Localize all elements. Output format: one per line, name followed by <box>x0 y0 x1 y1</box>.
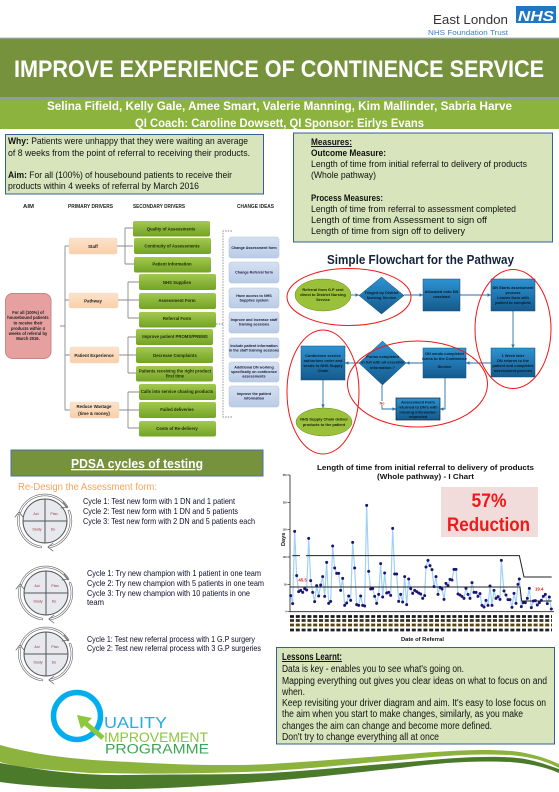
flowchart nodes: process <box>506 290 520 295</box>
callout: 57% reduction: Reduction <box>447 515 530 536</box>
flowchart nodes: Nursing Service <box>367 295 397 300</box>
secondary driver boxes: Assessment Form <box>158 298 196 303</box>
PDSA cycle text block 3: Cycle 2: Test new referral process with 3 G.P surgeries <box>87 644 261 653</box>
chart plot: 250 <box>283 475 287 477</box>
aim box: housebound patients <box>7 315 49 320</box>
I chart <box>281 463 554 643</box>
secondary driver boxes: Patients receiving the right product <box>139 368 212 374</box>
QI programme logo: IMPROVEMENT <box>104 730 208 745</box>
panel: lessons learnt: Don't try to change everything all at once <box>282 732 439 743</box>
icon: PDSA cycle 2: Do <box>52 600 56 604</box>
chart plot <box>283 475 554 614</box>
flowchart nodes: DN returns to the <box>497 358 530 363</box>
PDSA heading: PDSA cycles of testing <box>71 456 203 471</box>
flowchart nodes: Service <box>316 297 331 302</box>
panel: measures: (Whole pathway) <box>311 170 376 181</box>
secondary driver boxes: Costs of Re-delivery <box>156 426 198 431</box>
panel: lessons learnt: when. <box>281 687 305 698</box>
icon: PDSA cycle 3: Act <box>34 645 40 649</box>
change idea boxes: information <box>244 396 265 400</box>
flowchart nodes: caseload <box>433 294 450 299</box>
flowchart nodes: DN Starts assessment <box>492 285 534 290</box>
flowchart nodes: assessment process <box>494 368 532 373</box>
chart plot: 50 <box>284 584 287 586</box>
secondary driver boxes: Quality of Assessments <box>147 226 196 232</box>
PDSA cycle text block 1: Cycle 3: Test new form with 2 DN and 5 patients each <box>83 517 255 526</box>
change idea boxes: Change Assessment form <box>231 246 277 250</box>
chart axis labels: Date of Referral <box>401 637 444 643</box>
change idea boxes: Have access to NHS <box>236 294 272 298</box>
change idea boxes: Additional DN working <box>234 366 274 370</box>
chart title <box>317 463 534 481</box>
flowchart arrows <box>323 295 513 409</box>
flowchart nodes: missing information <box>399 410 437 414</box>
header logo: East London NHS Foundation Trust: NHS <box>518 8 554 25</box>
secondary driver boxes: Decrease Complaints <box>153 353 197 358</box>
change idea boxes <box>229 237 279 407</box>
chart title: Length of time from initial referral to delivery of products <box>317 463 534 472</box>
secondary driver boxes <box>133 221 216 436</box>
panel: lessons learnt: changes the aim can change and become more defined. <box>282 721 492 732</box>
chart x-axis date ticks <box>290 616 552 630</box>
panel: why and aim: products within 4 weeks of referral by March 2016 <box>8 181 199 192</box>
primary driver boxes: Reduce Wastage <box>77 404 112 409</box>
panel: why and aim: Aim: For all (100%) of housebound patients to receive their <box>8 170 232 181</box>
PDSA cycle text block 1: Cycle 1: Test new form with 1 DN and 1 patient <box>83 497 236 506</box>
aim box: March 2016. <box>16 336 40 341</box>
icon: PDSA cycle 2: Act <box>34 584 40 588</box>
chart plot: 45.5 <box>298 578 307 583</box>
flowchart nodes: Triaged by District <box>365 290 399 295</box>
panel: measures <box>294 133 552 242</box>
PDSA cycle text block 3 <box>87 635 261 653</box>
icon: PDSA cycle 3 <box>16 628 72 684</box>
aim box: weeks of referral by <box>8 331 48 336</box>
flowchart nodes: patient and completes <box>492 363 534 368</box>
flowchart nodes: No <box>380 402 385 406</box>
chart plot: 0 <box>285 612 287 614</box>
panel: why and aim: Why: Patients were unhappy that they were waiting an average <box>8 136 248 147</box>
flowchart nodes: Forms completed <box>366 354 399 359</box>
panel: lessons learnt: Data is key - enables you to see what's going on. <box>282 664 464 675</box>
panel: measures: Measures: <box>311 137 352 148</box>
panel: lessons learnt: Lessons Learnt: <box>282 652 342 663</box>
chart plot: 19.4 <box>535 586 544 591</box>
panel: measures: Length of time from Assessment to sign off <box>311 215 487 226</box>
flowchart nodes: information ? <box>370 365 396 370</box>
PDSA cycle text block 2: Cycle 1: Try new champion with 1 patient in one team <box>87 569 261 578</box>
driver diagram <box>6 204 279 436</box>
PDSA cycle text block 2: Cycle 2: Try new champion with 5 patients in one team <box>87 579 264 588</box>
QI programme logo: UALITY <box>104 715 167 732</box>
secondary driver boxes: Improve patient PROMS/PREMS <box>142 334 208 339</box>
icon: PDSA cycle 3: Do <box>52 660 56 664</box>
PDSA cycle text block 2 <box>87 569 264 607</box>
flowchart nodes: Leaves form with <box>497 295 530 300</box>
primary driver boxes: (time & money) <box>78 411 110 416</box>
flowchart nodes: Chain <box>318 368 329 373</box>
change idea boxes: Include patient information <box>230 344 278 348</box>
panel: measures: Length of time from sign off to delivery <box>311 226 465 237</box>
icon: PDSA cycle 2: Study <box>33 600 43 604</box>
header logo: East London NHS Foundation Trust: NHS Foundation Trust <box>428 28 509 37</box>
re-design subheading: Re-Design the Assessment form: <box>18 482 157 493</box>
flowchart nodes: 1 Week later <box>502 353 525 358</box>
red highlight ellipses <box>287 268 551 454</box>
team names band: QI Coach: Caroline Dowsett, QI Sponsor: Eirlys Evans <box>135 118 424 130</box>
change idea boxes: Improve the patient <box>237 392 272 396</box>
chart title: (Whole pathway) - I Chart <box>377 472 475 481</box>
PDSA heading <box>11 450 263 476</box>
change idea boxes: specifically on continence <box>231 370 277 374</box>
flowchart nodes: Allocated onto DN <box>425 289 459 294</box>
flowchart nodes: NHS Supply Chain deliver <box>300 416 348 422</box>
driver diagram column headings: AIM <box>23 204 34 210</box>
secondary driver boxes: first time <box>166 374 185 378</box>
icon: PDSA cycle 2: Plan <box>51 584 59 588</box>
flowchart nodes: requested <box>409 414 428 419</box>
PDSA cycle text block 1 <box>83 497 255 526</box>
driver diagram column headings: PRIMARY DRIVERS <box>68 204 114 210</box>
flowchart nodes: patient to complete <box>495 300 532 305</box>
flowchart title: Simple Flowchart for the Pathway <box>327 252 515 267</box>
icon: PDSA cycle 3: Plan <box>51 645 59 649</box>
icon: PDSA cycle 1: Study <box>32 528 42 532</box>
flowchart nodes: returned to DN's with <box>398 404 438 410</box>
icon: PDSA cycle 1: Act <box>33 512 39 516</box>
aim box: products within 4 <box>11 326 46 331</box>
flowchart nodes: forms to the Continence <box>422 356 468 361</box>
primary driver boxes: Pathway <box>84 298 102 304</box>
chart axis labels <box>281 533 444 643</box>
callout: 57% reduction <box>441 487 538 537</box>
driver diagram column headings: CHANGE IDEAS <box>237 204 275 210</box>
flowchart nodes <box>295 277 535 436</box>
flowchart nodes: authorises order and <box>304 358 343 363</box>
header logo: East London NHS Foundation Trust <box>428 6 556 37</box>
primary driver boxes: Staff <box>88 244 98 249</box>
header logo: East London NHS Foundation Trust: East London <box>433 12 508 27</box>
change idea boxes: assessments <box>242 374 266 378</box>
secondary driver boxes: Calls into service chasing products <box>141 389 214 394</box>
change idea boxes: Improve and increase staff <box>231 318 278 322</box>
chart plot: 100 <box>283 557 287 559</box>
change idea boxes: Change Referral form <box>235 270 274 274</box>
chart plot: 200 <box>283 503 287 505</box>
flowchart <box>287 252 551 454</box>
PDSA cycle text block 1: Cycle 2: Test new form with 1 DN and 5 patients <box>83 507 238 516</box>
flowchart nodes: direct to District Nursing <box>300 292 346 297</box>
chart plot: 150 <box>283 530 287 532</box>
panel: lessons learnt <box>276 648 554 744</box>
flowchart nodes: Assessment Form <box>401 400 435 404</box>
panel: why and aim <box>6 134 264 194</box>
icon: PDSA cycle 1: Plan <box>50 512 58 516</box>
icon: PDSA cycle 2 <box>16 567 72 623</box>
flowchart nodes: in full with all essential <box>361 360 404 364</box>
primary driver boxes: Patient Experience <box>74 353 114 358</box>
flowchart nodes: Referral from G.P sent <box>302 287 344 292</box>
flowchart nodes: products to the patient <box>303 422 346 427</box>
secondary driver boxes: Failed deliveries <box>160 407 194 412</box>
icon: PDSA cycle 1 <box>15 495 71 551</box>
aim box: For all (100%) of <box>12 310 44 315</box>
secondary driver boxes: NHS Supplies <box>163 280 192 285</box>
icon: PDSA cycle 3: Study <box>33 660 43 664</box>
PDSA cycle text block 2: Cycle 3: Try new champion with 10 patients in one <box>87 589 250 598</box>
panel: lessons learnt: the aim when you start to make changes, similarly, as you make <box>282 709 523 720</box>
primary driver boxes <box>69 238 119 418</box>
team names band <box>0 97 559 130</box>
footer swoosh <box>0 745 559 789</box>
change idea boxes: in the staff training sessions <box>229 348 279 352</box>
team names band: Selina Fifield, Kelly Gale, Amee Smart, Valerie Manning, Kim Mallinder, Sabria Harve <box>47 101 512 113</box>
change idea boxes: Supplies system <box>239 298 269 302</box>
driver diagram column headings: SECONDARY DRIVERS <box>133 204 186 210</box>
driver connectors <box>60 228 232 428</box>
panel: measures: Process Measures: <box>311 193 383 204</box>
flowchart nodes: DN sends completed <box>425 351 464 356</box>
secondary driver boxes: Referral Form <box>163 316 191 321</box>
change idea boxes: training sessions <box>239 322 269 326</box>
panel: measures: Outcome Measure: <box>311 148 386 159</box>
callout: 57% reduction: 57% <box>472 491 507 512</box>
aim box <box>6 294 51 358</box>
QI programme logo <box>54 692 209 756</box>
flowchart nodes: sends to NHS Supply <box>303 363 344 368</box>
panel: measures: Length of time from initial referral to delivery of products <box>311 159 527 170</box>
panel: why and aim: of 8 weeks from the point of referral to receiving their products. <box>8 148 250 159</box>
flowchart nodes: Continence service <box>305 353 342 358</box>
title banner <box>0 38 559 97</box>
driver diagram column headings <box>23 204 275 210</box>
PDSA cycle text block 2: team <box>87 598 104 607</box>
panel: measures: Length of time from referral to assessment completed <box>311 204 516 215</box>
aim box: to receive their <box>13 321 43 326</box>
chart axis labels: Days <box>281 533 287 546</box>
secondary driver boxes: Continuity of Assessments <box>144 244 200 248</box>
PDSA cycle text block 3: Cycle 1: Test new referral process with 1 G.P surgery <box>87 635 256 644</box>
QI programme logo: PROGRAMME <box>105 742 209 756</box>
icon: PDSA cycle 1: Do <box>51 528 55 532</box>
flowchart nodes: Service <box>438 364 452 369</box>
secondary driver boxes: Patient Information <box>152 262 192 266</box>
